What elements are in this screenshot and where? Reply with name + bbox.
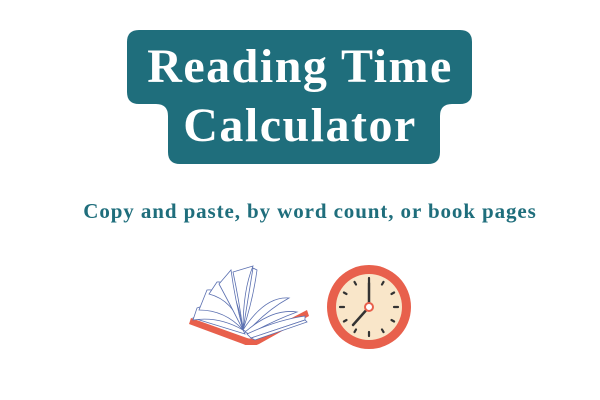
title box: [127, 30, 472, 164]
title text: Calculator: [183, 99, 417, 152]
title text: [147, 40, 453, 152]
icon: open book: [189, 265, 309, 345]
title text: Reading Time: [147, 40, 453, 93]
icon: clock: [327, 265, 411, 349]
subtitle: Copy and paste, by word count, or book pages: [83, 199, 537, 223]
